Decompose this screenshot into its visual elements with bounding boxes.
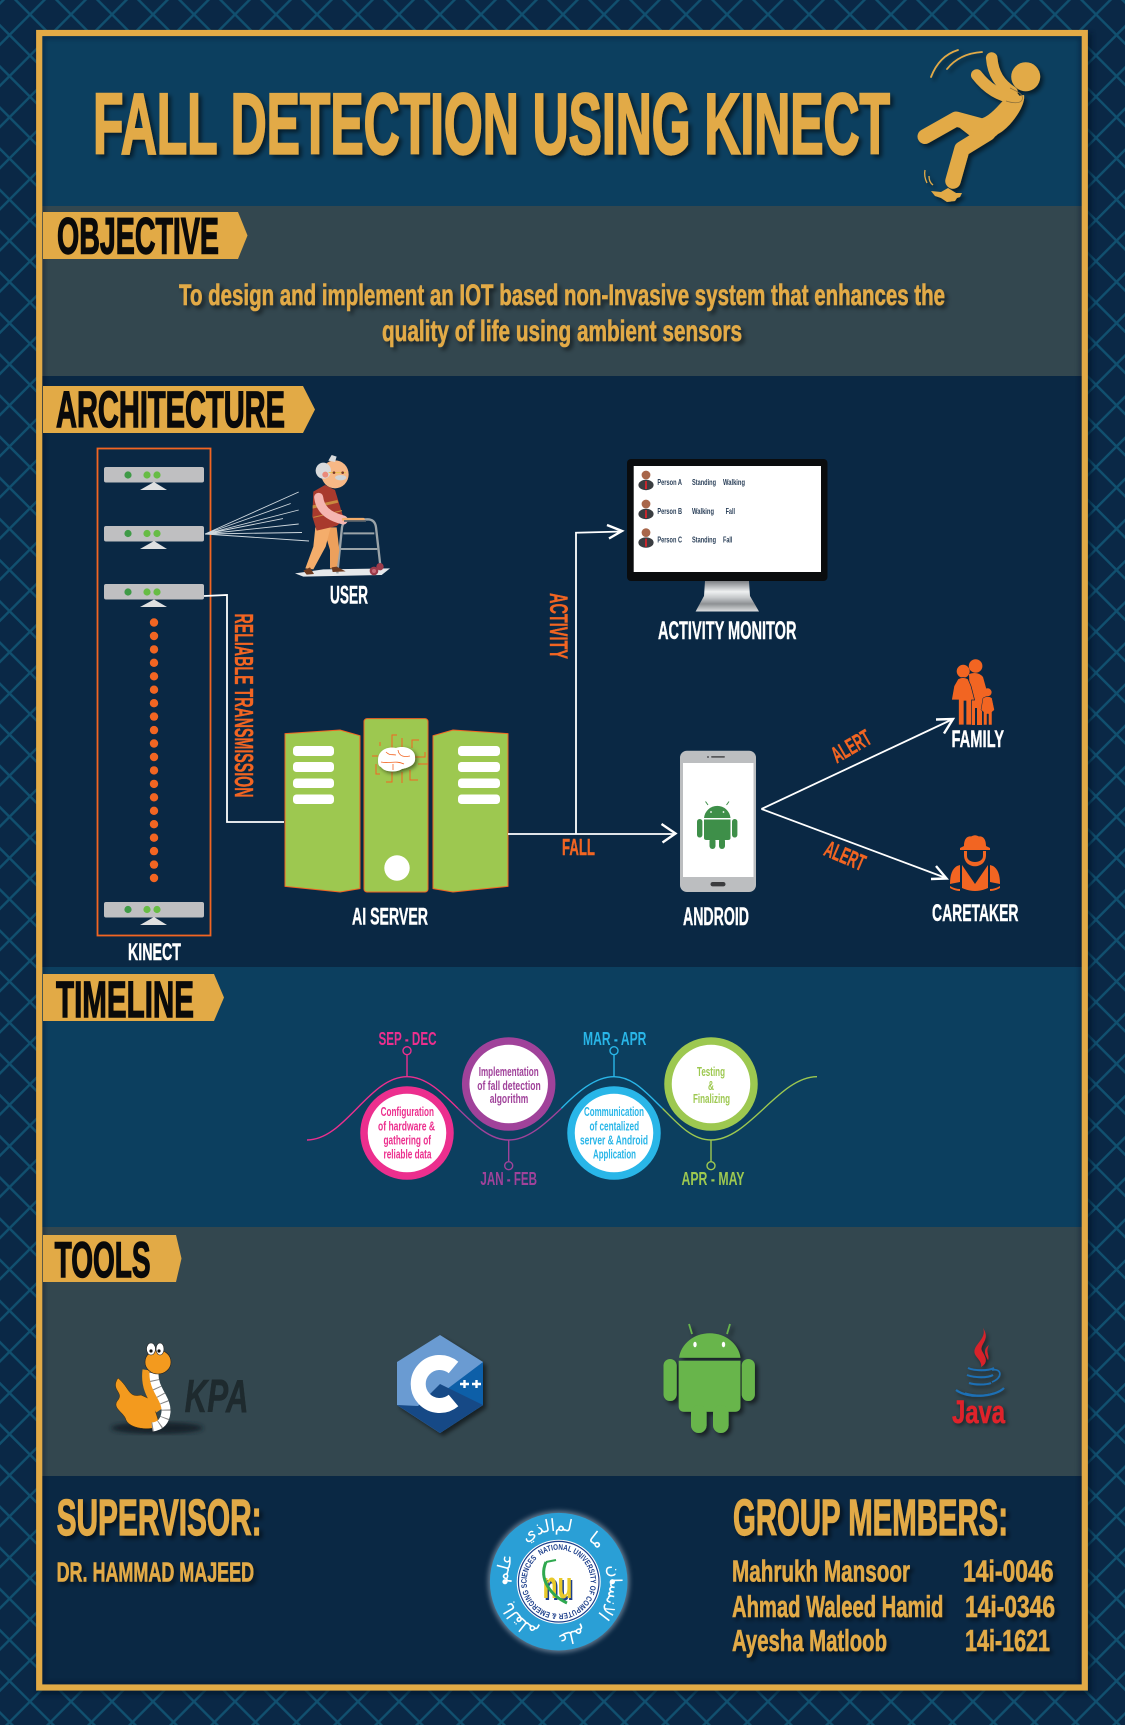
milestone: mar-apr: Communication [584, 1104, 644, 1119]
heading: objective [43, 208, 248, 264]
heading: timeline: TIMELINE [56, 971, 194, 1028]
arrow: alert to caretaker [761, 809, 946, 879]
panel: header [42, 36, 1082, 206]
list: group members: 14i-0046 [963, 1554, 1054, 1589]
milestone: apr-may [668, 1041, 754, 1189]
milestone: apr-may: Finalizing [693, 1091, 730, 1106]
heading: timeline [43, 971, 224, 1028]
icon: falling person [925, 50, 1040, 202]
milestone: jan-feb: algorithm [490, 1091, 528, 1106]
kinect sensor 2 [104, 526, 204, 549]
kinect dots [150, 618, 158, 882]
monitor row 2: Person B [657, 506, 682, 516]
list: group members: 14i-0346 [965, 1589, 1055, 1624]
institution ring text: NATIONAL UNIVERSITY OF COMPUTER & EMERGING SCIENCES [521, 1544, 596, 1620]
server centre panel [364, 719, 428, 892]
label: activity monitor: ACTIVITY MONITOR [658, 617, 796, 645]
icon: caretaker [950, 835, 1000, 891]
label: AI server: AI SERVER [352, 904, 428, 930]
panel: footer [42, 1476, 1082, 1685]
monitor row 2 [638, 500, 735, 519]
icon: c++ logo [397, 1335, 483, 1433]
milestone: sep-dec: of hardware & [378, 1118, 435, 1134]
heading: supervisor: SUPERVISOR: [57, 1489, 262, 1546]
milestone: jan-feb [466, 1041, 552, 1189]
nu monogram: nu [544, 1567, 574, 1609]
milestone: mar-apr: MAR - APR [583, 1028, 646, 1049]
monitor row 1: Standing [692, 477, 716, 487]
server left panel [285, 730, 360, 892]
panel: architecture [42, 376, 1082, 967]
milestone: mar-apr: Application [593, 1146, 636, 1162]
AI server [285, 719, 508, 892]
wave line [307, 1077, 817, 1140]
icon: kpa snake logo [111, 1343, 249, 1434]
milestone: sep-dec [364, 1028, 450, 1176]
heading: objective: OBJECTIVE [57, 208, 219, 264]
icon: family [952, 659, 994, 725]
monitor row 1 [638, 471, 745, 490]
panel: timeline [42, 967, 1082, 1227]
label: user: USER [330, 582, 368, 610]
connector: kinect to server [204, 595, 284, 822]
monitor row 3: Person C [657, 535, 682, 545]
heading: tools [43, 1232, 182, 1288]
timeline chart [307, 1028, 817, 1189]
list: group members: 14i-1621 [965, 1623, 1050, 1658]
heading: tools: TOOLS [55, 1232, 151, 1288]
icon: kpa snake logo: KPA [185, 1370, 249, 1422]
milestone: mar-apr: of centalized [590, 1118, 639, 1134]
heading: architecture [43, 381, 315, 438]
milestone: sep-dec: SEP - DEC [378, 1028, 436, 1049]
icon: android robot small [697, 802, 737, 849]
kinect array box [98, 448, 210, 936]
monitor row 3: Fall [723, 535, 732, 545]
monitor row 3 [638, 528, 732, 548]
list: group members: Ayesha Matloob [732, 1623, 887, 1658]
milestone: jan-feb: Implementation [479, 1064, 539, 1079]
icon: android phone [680, 751, 756, 892]
label: reliable transmission: RELIABLE TRANSMISSION [229, 614, 259, 798]
milestone: apr-may: & [708, 1078, 714, 1093]
monitor row 3: Standing [692, 535, 716, 545]
list: group members: Ahmad Waleed Hamid [732, 1589, 943, 1624]
label: android: ANDROID [683, 903, 749, 931]
label: activity: ACTIVITY [544, 593, 572, 659]
icon: java logo [952, 1328, 1005, 1430]
text: supervisor name: DR. HAMMAD MAJEED [57, 1557, 254, 1588]
panel: tools [42, 1227, 1082, 1476]
text: objective statement [179, 279, 945, 348]
arabic ring text: الذي علم بالقلم علم الانسان ما لم يعلم [496, 1518, 623, 1644]
text: objective statement: quality of life using ambient sensors [382, 315, 742, 348]
label: caretaker: CARETAKER [932, 900, 1018, 927]
nu monogram [542, 1560, 574, 1609]
panel: objective [42, 206, 1082, 376]
label: alert bottom: ALERT [821, 835, 870, 876]
monitor row 1: Person A [657, 477, 682, 487]
label: alert top: ALERT [826, 724, 876, 768]
monitor row 1: Walking [723, 477, 745, 487]
milestone: jan-feb: of fall detection [477, 1078, 541, 1093]
university logo [485, 1508, 632, 1656]
icon: brain [372, 735, 428, 783]
milestone: apr-may: APR - MAY [682, 1168, 745, 1189]
arrow: fall to android [508, 824, 676, 842]
kinect sensor 4 [104, 902, 204, 925]
ring dots [502, 1579, 615, 1584]
label: kinect: KINECT [128, 939, 181, 966]
milestone: mar-apr: server & Android [580, 1132, 648, 1148]
heading: architecture: ARCHITECTURE [56, 381, 285, 438]
nu monogram: nu [542, 1565, 572, 1607]
monitor row 2: Walking [692, 506, 714, 516]
illustration: elderly user with walker [295, 455, 390, 577]
icon: java logo: Java [952, 1394, 1005, 1430]
arrow: alert to family [761, 719, 953, 809]
milestone: sep-dec: reliable data [384, 1146, 432, 1162]
kinect sensor 3 [104, 584, 204, 607]
monitor row 2: Fall [726, 506, 735, 516]
label: family: FAMILY [952, 726, 1004, 753]
activity monitor [627, 459, 828, 612]
list: group members: Mahrukh Mansoor [732, 1554, 910, 1589]
milestone: apr-may: Testing [697, 1064, 725, 1079]
milestone: mar-apr [571, 1028, 657, 1176]
list: group members [732, 1554, 1055, 1658]
milestone: jan-feb: JAN - FEB [480, 1168, 537, 1189]
milestone: sep-dec: gathering of [384, 1132, 431, 1148]
sensor rays [205, 492, 309, 541]
kinect sensor 1 [104, 467, 204, 490]
label: fall: FALL [562, 834, 595, 860]
server right panel [433, 730, 508, 892]
arrow: activity to monitor [576, 525, 622, 834]
milestone: sep-dec: Configuration [381, 1104, 434, 1119]
icon: android logo [664, 1324, 755, 1433]
